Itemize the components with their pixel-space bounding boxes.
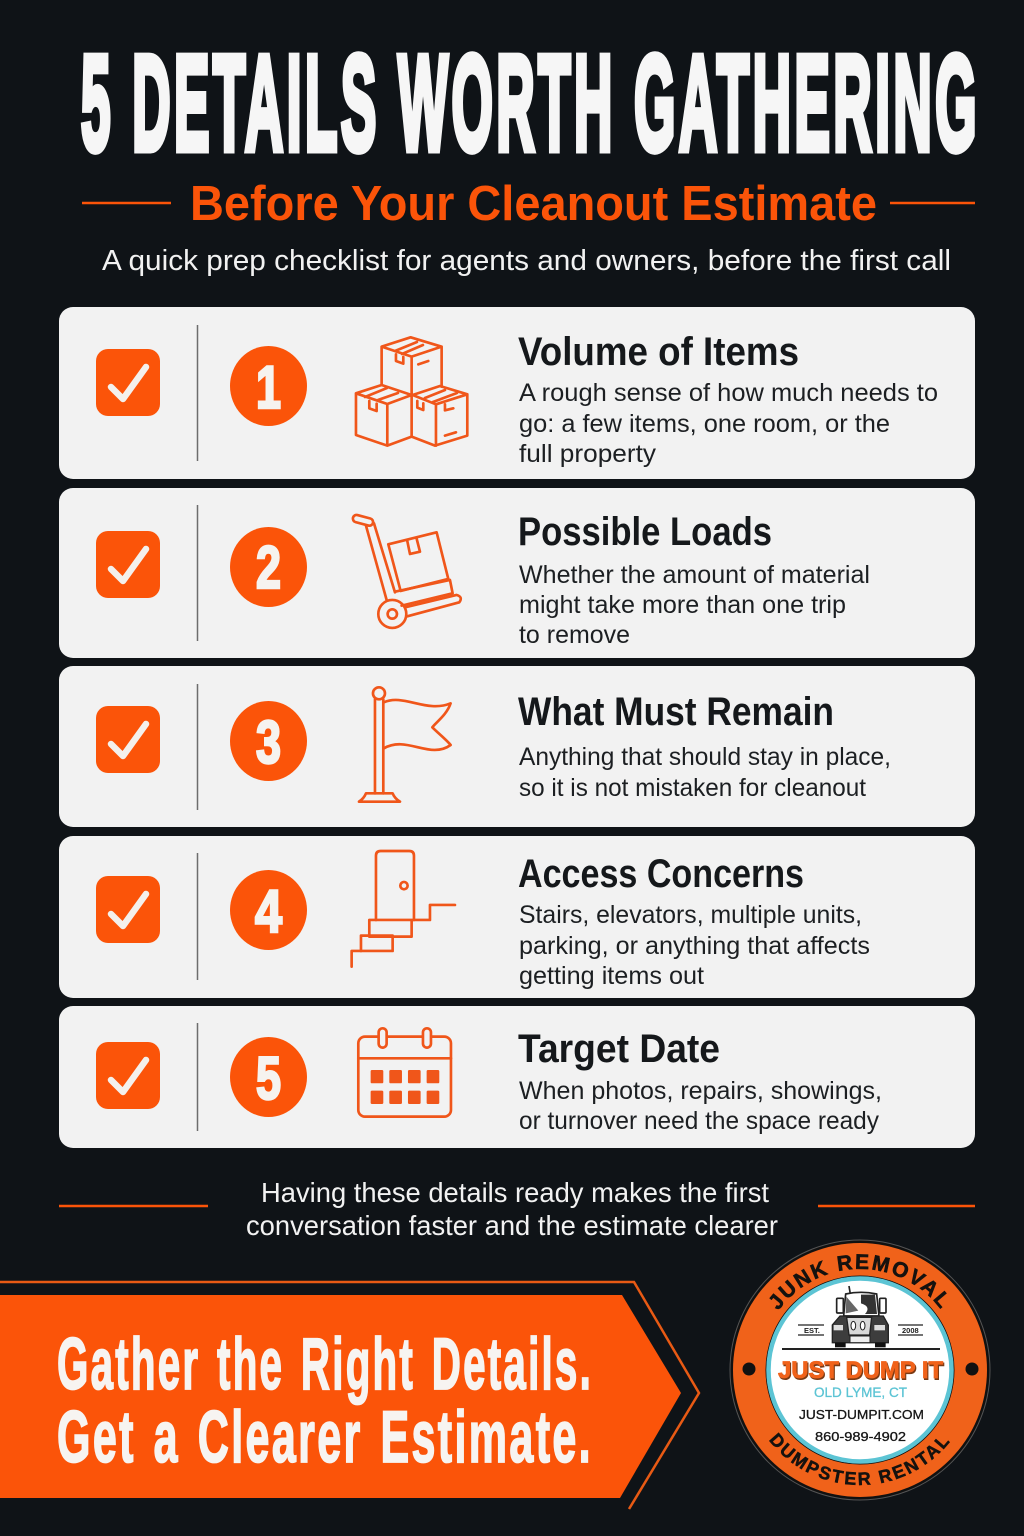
number badge 3 xyxy=(230,701,307,781)
number badge 5 xyxy=(230,1037,307,1117)
ground line xyxy=(782,1348,940,1350)
number badge 4 xyxy=(230,870,307,950)
icon: checkbox 3 xyxy=(96,706,160,773)
established year marks: EST. xyxy=(804,1326,820,1335)
heading: Access Concerns xyxy=(518,852,804,896)
call to action arrow banner xyxy=(0,1282,699,1509)
panel: item 5 target date xyxy=(59,1006,975,1148)
subtitle with side rules: Before Your Cleanout Estimate xyxy=(190,177,877,231)
panel: item 3 what must remain xyxy=(59,666,975,827)
call to action arrow banner: Get a Clearer Estimate. xyxy=(57,1397,593,1478)
description xyxy=(519,901,870,990)
description: so it is not mistaken for cleanout xyxy=(519,774,866,802)
description: to remove xyxy=(519,621,630,649)
icon: hand truck xyxy=(352,514,461,628)
description: A rough sense of how much needs to xyxy=(519,379,938,407)
number badge 1 xyxy=(230,346,307,426)
tagline: A quick prep checklist for agents and owners, before the first call xyxy=(102,245,951,277)
number badge 3: 3 xyxy=(256,709,281,776)
heading: Possible Loads xyxy=(518,510,772,554)
description xyxy=(519,379,938,468)
icon: flag xyxy=(359,687,451,802)
logo badge: JUNK REMOVAL xyxy=(769,1254,947,1310)
logo name: JUST DUMP IT xyxy=(778,1357,943,1384)
number badge 1: 1 xyxy=(256,354,281,421)
icon: calendar xyxy=(358,1028,451,1117)
heading: What Must Remain xyxy=(518,690,834,734)
established year marks xyxy=(798,1325,923,1335)
description: might take more than one trip xyxy=(519,591,846,619)
panel: item 1 volume of items xyxy=(59,307,975,479)
icon: door and stairs xyxy=(352,851,455,967)
icon: stacked boxes xyxy=(356,337,467,446)
logo badge xyxy=(730,1240,990,1500)
truck illustration xyxy=(832,1286,888,1347)
description: go: a few items, one room, or the xyxy=(519,410,890,438)
description: When photos, repairs, showings, xyxy=(519,1077,882,1105)
logo website: JUST-DUMPIT.COM xyxy=(799,1407,924,1422)
logo phone: 860-989-4902 xyxy=(815,1429,906,1444)
closing note with side rules: conversation faster and the estimate clearer xyxy=(246,1210,778,1241)
description xyxy=(519,1077,882,1135)
established year marks: 2008 xyxy=(902,1326,919,1335)
call to action arrow banner: Gather the Right Details. xyxy=(57,1324,593,1405)
description: Whether the amount of material xyxy=(519,561,870,589)
icon: checkbox 1 xyxy=(96,349,160,416)
logo location: OLD LYME, CT xyxy=(814,1385,907,1400)
description: getting items out xyxy=(519,962,704,990)
description: parking, or anything that affects xyxy=(519,932,870,960)
icon: checkbox 4 xyxy=(96,876,160,943)
number badge 2: 2 xyxy=(256,534,281,601)
description: Stairs, elevators, multiple units, xyxy=(519,901,862,929)
description: full property xyxy=(519,440,657,468)
heading: Volume of Items xyxy=(518,330,799,374)
closing note with side rules xyxy=(59,1177,975,1241)
number badge 2 xyxy=(230,527,307,607)
description: or turnover need the space ready xyxy=(519,1107,879,1135)
description: Anything that should stay in place, xyxy=(519,743,891,771)
logo badge: DUMPSTER RENTAL xyxy=(769,1432,950,1486)
logo name: JUST DUMP IT xyxy=(779,1358,944,1386)
description xyxy=(519,561,870,649)
description xyxy=(519,743,891,802)
icon: checkbox 5 xyxy=(96,1042,160,1109)
icon: checkbox 2 xyxy=(96,531,160,598)
heading: Target Date xyxy=(518,1027,720,1071)
closing note with side rules: Having these details ready makes the first xyxy=(261,1177,769,1208)
panel: item 2 possible loads xyxy=(59,488,975,658)
number badge 5: 5 xyxy=(256,1045,281,1112)
panel: item 4 access concerns xyxy=(59,836,975,998)
number badge 4: 4 xyxy=(255,878,283,945)
